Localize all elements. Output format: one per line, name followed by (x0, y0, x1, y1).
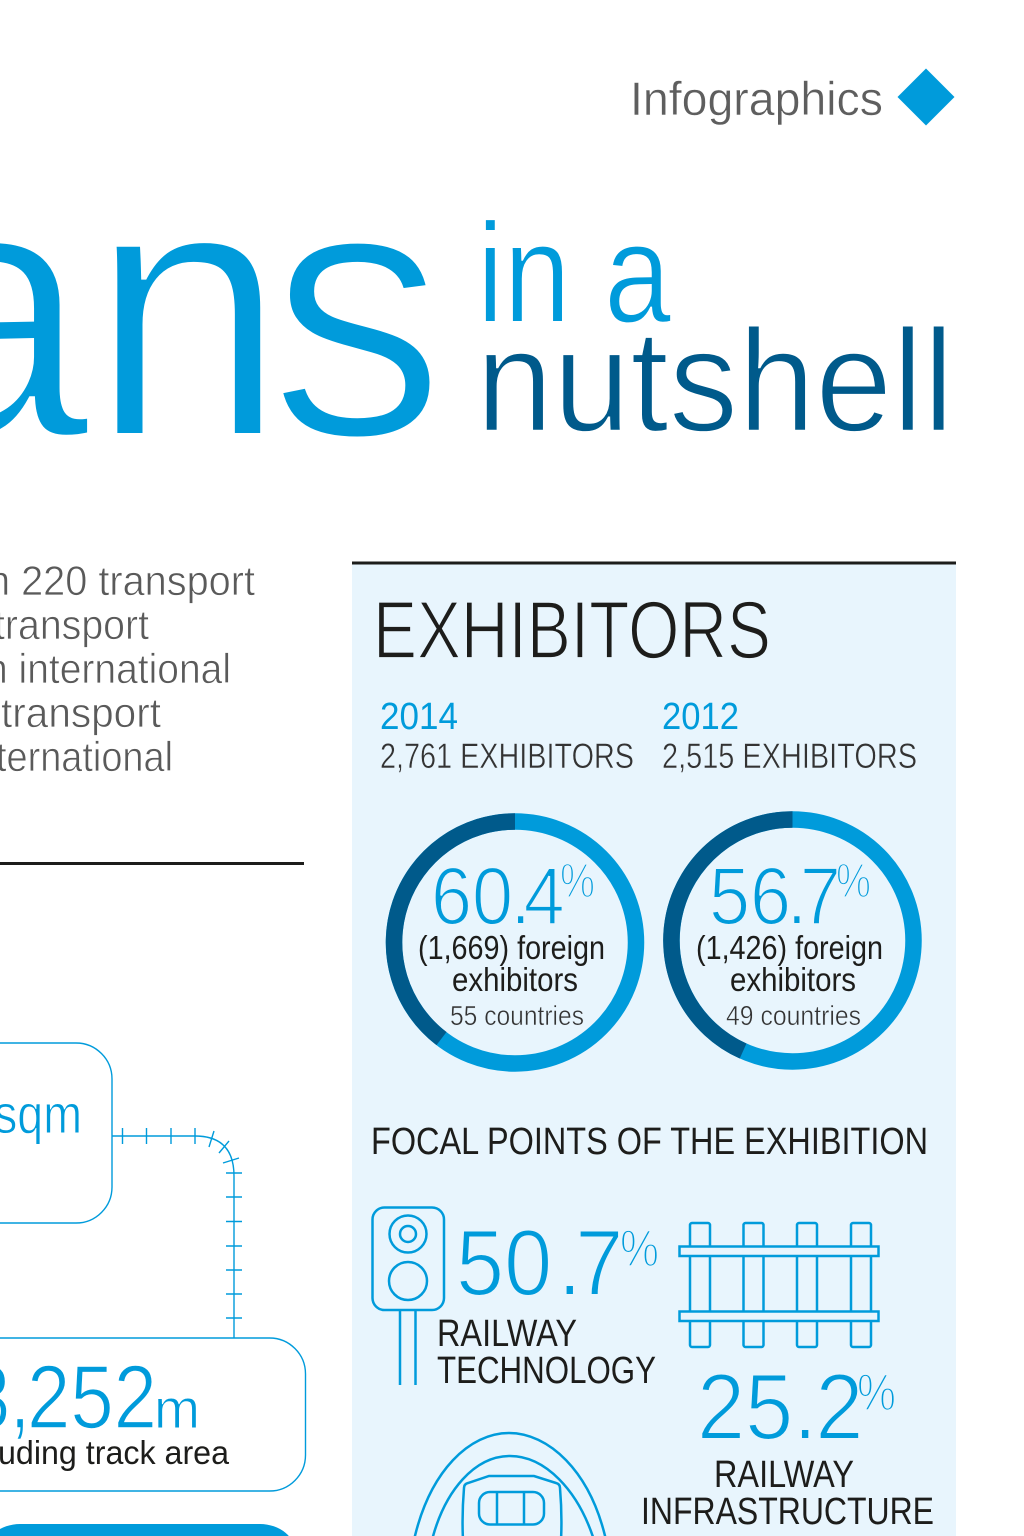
title: in a: in a (477, 194, 671, 353)
year columns: 2,515 EXHIBITORS (662, 737, 917, 776)
donut chart: 2012 foreign exhibitors: 49 countries (726, 1000, 861, 1031)
header label: Infographics: Infographics (630, 72, 883, 125)
year columns: 2014 (380, 696, 458, 738)
intro text block (0, 557, 255, 780)
donut chart: 2012 foreign exhibitors (671, 819, 914, 1062)
donut chart: 2012 foreign exhibitors: 56.7 (709, 849, 841, 942)
stat box: track length: 252 (27, 1348, 157, 1448)
donut chart: 2012 foreign exhibitors: (1,426) foreign (696, 929, 883, 966)
title: nutshell: nutshell (476, 299, 954, 462)
intro text block: ternational (0, 733, 173, 780)
stat: railway infrastructure (641, 1355, 934, 1533)
stat: railway infrastructure: 25.2 (697, 1355, 863, 1460)
intro text block: transport (1, 689, 161, 736)
icon: railway track (680, 1223, 878, 1347)
icon: railway signal (372, 1208, 444, 1385)
donut chart: 2014 foreign exhibitors: % (560, 855, 595, 908)
panel: exhibitors (352, 562, 956, 1536)
donut chart: 2014 foreign exhibitors (394, 822, 636, 1064)
icon: railway track connector (112, 1128, 242, 1338)
stat box: track length: uding track area (0, 1434, 230, 1471)
stat: railway infrastructure: INFRASTRUCTURE (641, 1491, 934, 1533)
donut chart: 2014 foreign exhibitors: 60.4 (431, 849, 565, 942)
stat: railway technology: % (620, 1220, 659, 1278)
stat box: sqm (0, 1043, 112, 1223)
stat box: track length: m (154, 1377, 200, 1440)
stat: railway infrastructure: % (857, 1364, 896, 1422)
heading: exhibitors: EXHIBITORS (373, 585, 771, 676)
panel: space figures (0, 1043, 306, 1536)
blue box (cropped) (0, 1524, 296, 1536)
donut chart: 2012 foreign exhibitors: % (836, 855, 871, 908)
donut chart: 2014 foreign exhibitors: exhibitors (452, 961, 578, 998)
year columns: 2,761 EXHIBITORS (380, 737, 634, 776)
stat: railway technology: TECHNOLOGY (437, 1350, 656, 1392)
icon: train front in tunnel (414, 1433, 606, 1536)
stat: railway technology: 50.7 (456, 1211, 623, 1316)
donut chart: 2012 foreign exhibitors: exhibitors (730, 961, 856, 998)
stat: railway technology (437, 1211, 659, 1392)
title: ans (clipped): s (270, 107, 445, 514)
title: ans (clipped): n (90, 107, 286, 514)
donut chart: 2014 foreign exhibitors: 55 countries (450, 1000, 584, 1031)
year columns: 2012 (662, 696, 739, 738)
heading: focal points: FOCAL POINTS OF THE EXHIBITION (371, 1121, 928, 1163)
stat: railway technology: RAILWAY (437, 1313, 577, 1355)
year columns (380, 696, 917, 776)
donut chart: 2014 foreign exhibitors: (1,669) foreign (418, 929, 605, 966)
stat box: track length (0, 1338, 306, 1491)
stat: railway infrastructure: RAILWAY (714, 1454, 854, 1496)
